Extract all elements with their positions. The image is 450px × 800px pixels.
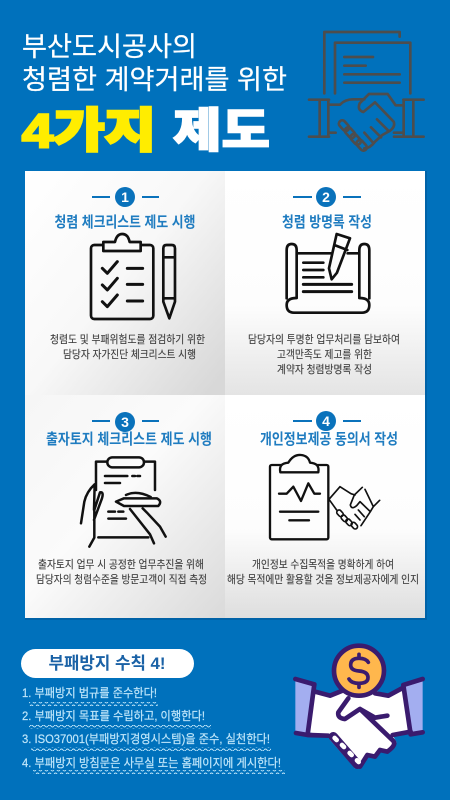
panel: 2 integrity guestbook: [225, 171, 425, 395]
heading 3: 출자토지 체크리스트 제도 시행: [46, 431, 212, 448]
title: 4가지: [22, 104, 156, 157]
number badge 1: [92, 187, 159, 207]
heading 2: 청렴 방명록 작성: [282, 214, 372, 231]
panel: 3 business trip checklist: [25, 395, 225, 618]
icon: documents and handshake: [309, 32, 424, 152]
number badge 3: [92, 412, 159, 432]
body text 3: [36, 557, 207, 586]
number badge 2: 2: [322, 189, 330, 205]
rules list: [22, 686, 285, 774]
body text 2: 계약자 청렴방명록 작성: [277, 362, 372, 376]
rules list: 3. ISO37001(부패방지경영시스템)을 준수, 실천한다!: [22, 731, 270, 746]
number badge 4: 4: [322, 413, 330, 429]
number badge 3: 3: [121, 414, 129, 430]
heading 1: 청렴 체크리스트 제도 시행: [54, 214, 196, 231]
panel: 4 privacy consent: [225, 395, 425, 618]
heading 4: 개인정보제공 동의서 작성: [260, 431, 398, 448]
title: [22, 32, 287, 157]
number badge 4: [293, 411, 361, 431]
body text 2: 고객만족도 제고를 위한: [277, 348, 372, 361]
pill heading: [21, 649, 194, 678]
number badge 1: 1: [121, 189, 129, 205]
title: 부산도시공사의: [22, 32, 197, 62]
title: 제도: [173, 104, 270, 157]
icon: clipboard checklist and pencil: [91, 234, 175, 319]
panel: card grid shadow: [25, 171, 427, 620]
panel: 1 integrity checklist: [25, 171, 225, 395]
body text 2: [248, 332, 400, 376]
body text 4: 개인정보 수집목적을 명확하게 하여: [252, 557, 394, 571]
body text 1: [50, 332, 205, 361]
icon: hands signing document: [81, 457, 166, 547]
body text 2: 담당자의 투명한 업무처리를 담보하여: [248, 332, 400, 346]
body text 1: 담당자 자가진단 체크리스트 시행: [63, 348, 196, 361]
body text 4: 해당 목적에만 활용할 것을 정보제공자에게 인지: [227, 572, 419, 586]
icon: handshake with dollar coin: [295, 646, 423, 768]
body text 1: 청렴도 및 부패위험도를 점검하기 위한: [50, 332, 205, 346]
body text 3: 출자토지 업무 시 공정한 업무추진을 위해: [38, 557, 204, 571]
pill heading: 부패방지 수칙 4!: [48, 654, 166, 673]
body text 3: 담당자의 청렴수준을 방문고객이 직접 측정: [36, 573, 207, 586]
icon: clipboard pulse and handshake: [270, 455, 380, 539]
title: 청렴한 계약거래를 위한: [22, 65, 287, 95]
number badge 2: [293, 187, 361, 207]
body text 4: [227, 557, 419, 586]
icon: scroll and pencil: [287, 234, 369, 313]
rules list: 4. 부패방지 방침문은 사무실 또는 홈페이지에 게시한다!: [22, 756, 281, 770]
rules list: 1. 부패방지 법규를 준수한다!: [22, 686, 157, 700]
rules list: 2. 부패방지 목표를 수립하고, 이행한다!: [22, 708, 205, 723]
